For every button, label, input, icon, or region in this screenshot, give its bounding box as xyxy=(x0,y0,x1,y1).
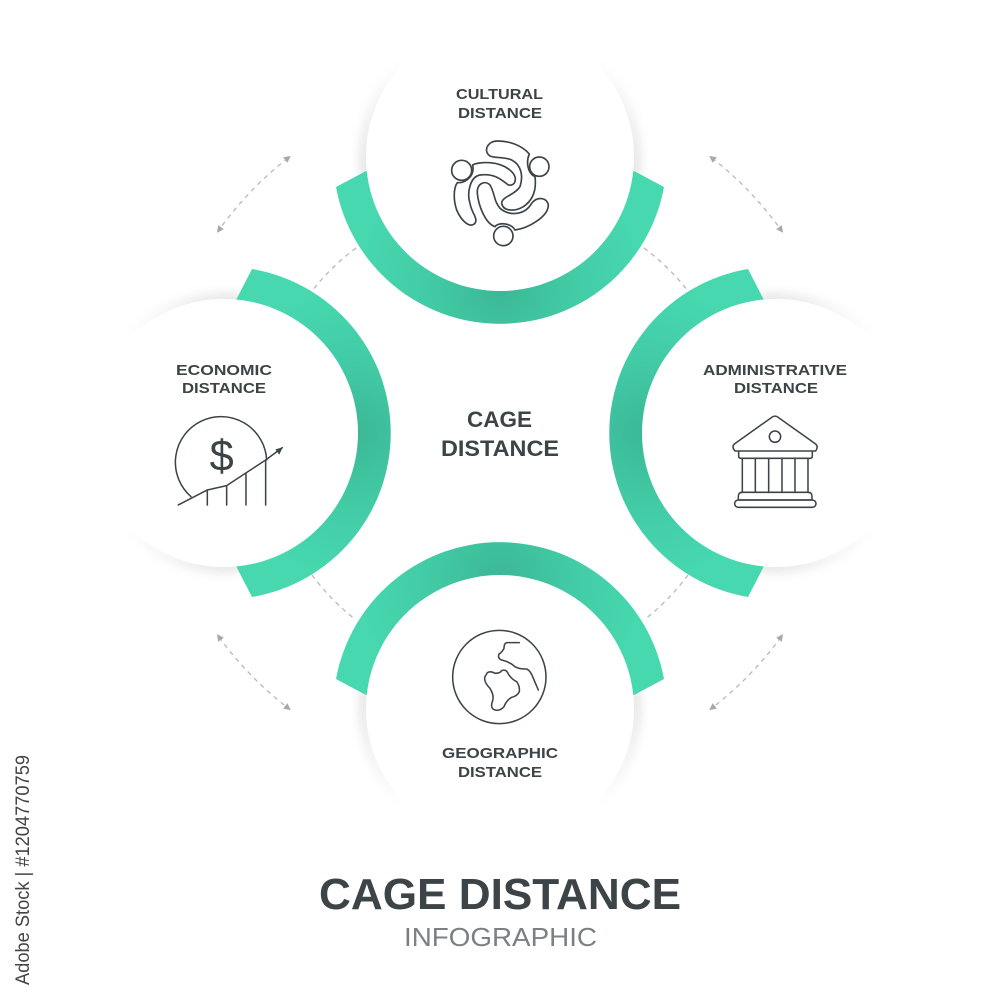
center heading xyxy=(441,407,559,461)
panel: economic distance xyxy=(90,269,391,597)
panel: administrative distance xyxy=(609,269,910,597)
green arc: economic xyxy=(236,269,391,597)
label: cultural distance: DISTANCE xyxy=(458,105,542,122)
label: economic distance xyxy=(176,362,272,397)
soft shadows beside circles near ring ends xyxy=(129,62,871,804)
label: geographic distance: GEOGRAPHIC xyxy=(442,745,558,762)
label: cultural distance: CULTURAL xyxy=(456,86,543,103)
white circle: cultural xyxy=(366,23,634,291)
green arc: administrative xyxy=(609,269,764,597)
icon: globe xyxy=(453,630,546,724)
inner dashed connectors xyxy=(312,248,688,620)
label: economic distance: DISTANCE xyxy=(182,380,266,397)
white circle: economic xyxy=(90,299,358,567)
panel: geographic distance xyxy=(336,542,664,843)
label: geographic distance xyxy=(442,745,558,781)
label: economic distance: ECONOMIC xyxy=(176,362,272,379)
icon: dollar coin with rising chart xyxy=(175,417,283,505)
subtitle: INFOGRAPHIC xyxy=(404,922,597,952)
label: administrative distance: ADMINISTRATIVE xyxy=(703,362,847,379)
white circle: administrative xyxy=(642,299,910,567)
green arc: geographic xyxy=(336,542,664,695)
stock id text: Adobe Stock | #1204770759 xyxy=(13,755,34,985)
label: cultural distance xyxy=(456,86,543,122)
title: CAGE DISTANCE xyxy=(319,870,681,919)
label: administrative distance xyxy=(703,362,847,397)
label: geographic distance: DISTANCE xyxy=(458,764,542,781)
white circle: geographic xyxy=(366,575,634,843)
outer dashed arrows between segments xyxy=(219,158,781,708)
green arc: cultural xyxy=(336,171,664,324)
icon: three people linked xyxy=(452,141,549,246)
center heading: DISTANCE xyxy=(441,436,559,461)
icon: bank building xyxy=(733,416,817,507)
panel: cultural distance xyxy=(336,23,664,324)
label: administrative distance: DISTANCE xyxy=(734,380,818,397)
center heading: CAGE xyxy=(467,407,532,432)
icon: dollar coin with rising chart: $ xyxy=(210,433,234,481)
